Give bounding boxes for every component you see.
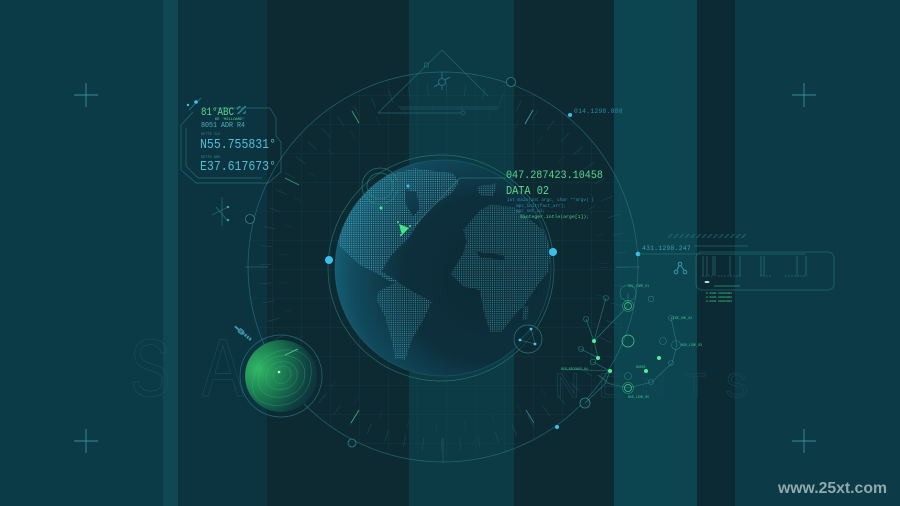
faint background title left: A (202, 323, 244, 414)
network labels: NOD_LINE_03 (681, 343, 702, 347)
latitude: N55.755831° (200, 138, 276, 153)
network labels: NOD05 (636, 365, 646, 369)
hatch band (668, 234, 746, 238)
icon: satellite (234, 325, 253, 342)
icon: panel dots (187, 100, 198, 106)
data heading: DATA 02 (506, 184, 549, 198)
star constellation icon (212, 197, 229, 226)
panel caption: 0.0000 00000000 (706, 300, 732, 303)
right data panel (636, 234, 834, 303)
network labels (561, 284, 702, 399)
icon: hatch block (237, 106, 246, 114)
panel caption: 0.0000 00000000 (706, 296, 732, 299)
code snippet: int main(int argc, char **argv) { (507, 198, 594, 203)
data readout (506, 170, 603, 220)
orbit node rings (246, 78, 590, 447)
network labels: NOD_LINE_05 (628, 395, 649, 399)
tick rings (265, 89, 621, 445)
outer orbit ring (248, 72, 638, 462)
panel frame (638, 246, 834, 290)
icon: molecule (434, 72, 450, 90)
coordinates panel (181, 98, 281, 183)
latitude label: SETTE ILE (201, 133, 220, 137)
bright radial ticks (245, 110, 640, 462)
panel caption: 0.0000 00000000 (706, 292, 732, 295)
small constellation circle (514, 325, 542, 353)
corner crosshairs (74, 83, 816, 453)
radar disc (240, 335, 322, 417)
network hub (622, 300, 634, 394)
network diagram (561, 284, 702, 403)
panel sublabel: DE 'MILLOARD' (215, 117, 245, 122)
code snippet: Sinteger.intle(arge[1]); (520, 214, 589, 220)
globe (335, 160, 551, 376)
watermark: www.25xt.com (777, 480, 887, 497)
world map dots (335, 168, 551, 360)
coordinate label: 431.1298.247 (642, 245, 691, 252)
code snippet: mpz_init(fact_arr); (516, 204, 566, 209)
radar grid (248, 72, 638, 462)
code snippet (507, 198, 594, 220)
inner orbit ring (328, 155, 554, 381)
coordinate label top: 014.1298.888 (574, 108, 623, 115)
continents (335, 168, 459, 283)
panel header: 81°ABC (201, 107, 234, 119)
icon: node dot (636, 252, 640, 256)
panel code: 8051 ADR R4 (201, 122, 245, 130)
network labels: LINE_INE_02 (671, 316, 692, 320)
network lines (562, 285, 680, 403)
faint background title right: NENTS (555, 367, 748, 405)
globe rim (335, 160, 551, 376)
orbit nodes blue (325, 113, 572, 429)
longitude: E37.617673° (200, 160, 276, 175)
longitude label: SETTE ARE (201, 156, 220, 160)
network labels: DSL_CORE_01 (628, 284, 649, 288)
top left globe target rings (362, 168, 506, 225)
faint background title left (130, 323, 244, 414)
glowing nodes (592, 339, 661, 373)
signal bars (702, 256, 806, 276)
icon: panel indicator (704, 281, 710, 283)
panel green line (714, 285, 740, 287)
network labels: DCS_SECONDS_04 (561, 367, 588, 371)
green location marker (380, 184, 411, 236)
code snippet: mpz_set_ui; (516, 209, 545, 214)
panel caption (706, 292, 732, 303)
contour lines (253, 350, 311, 405)
top triangle with molecule (378, 50, 500, 115)
data number: 047.287423.10458 (506, 170, 603, 182)
panel frame (181, 98, 281, 183)
icon: molecule (674, 262, 687, 274)
faint background title left: S (130, 323, 170, 414)
